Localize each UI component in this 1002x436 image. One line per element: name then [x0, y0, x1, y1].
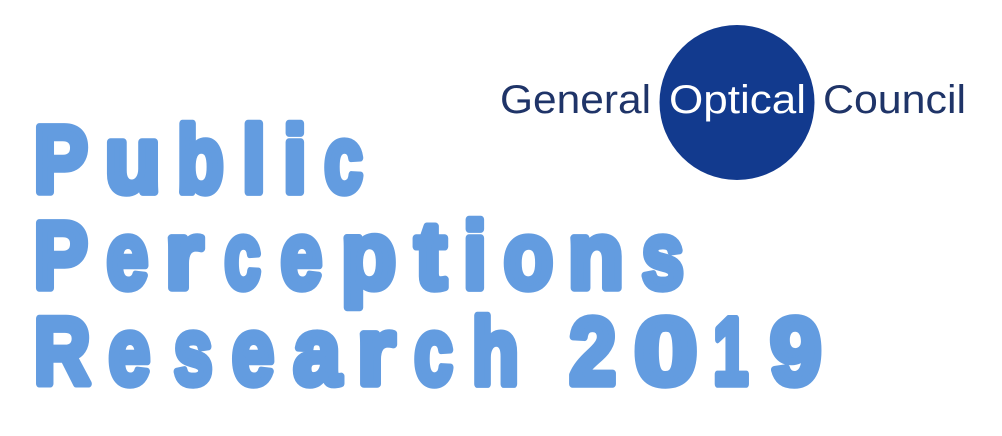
- title line 3: s: [174, 299, 212, 405]
- title line 3: 2: [570, 299, 616, 405]
- title line 3: 0: [634, 299, 697, 405]
- title line 3: r: [357, 299, 395, 405]
- title line 2: n: [568, 203, 624, 309]
- title line 3: c: [414, 299, 453, 405]
- title line 2: p: [341, 203, 396, 309]
- title line 2: o: [504, 203, 553, 309]
- title line 1: b: [177, 107, 224, 213]
- title line 3: R: [34, 299, 90, 405]
- title line 2: c: [224, 203, 261, 309]
- title line 2: t: [415, 203, 446, 309]
- logo word: General: General: [500, 78, 651, 122]
- title line 1: c: [324, 107, 363, 213]
- logo: General Optical Council: [500, 25, 966, 180]
- title: [34, 107, 821, 405]
- logo word: Optical: Optical: [669, 78, 806, 122]
- title line 2: s: [642, 203, 684, 309]
- title line 1: P: [34, 107, 88, 213]
- title line 2: r: [165, 203, 203, 309]
- title line 2: P: [34, 203, 88, 309]
- title line 3: h: [472, 299, 519, 405]
- title line 2: e: [281, 203, 322, 309]
- title line 1: i: [283, 107, 307, 213]
- title line 1: u: [105, 107, 161, 213]
- title line 2: e: [107, 203, 148, 309]
- title line 3: 9: [770, 299, 821, 405]
- title line 3: 1: [713, 299, 748, 405]
- title line 3: a: [294, 299, 342, 405]
- logo word: Council: Council: [823, 78, 966, 122]
- title line 3: e: [109, 299, 150, 405]
- title line 3: e: [232, 299, 274, 405]
- title line 1: l: [242, 107, 266, 213]
- logo circle: [660, 25, 814, 180]
- title line 2: i: [463, 203, 487, 309]
